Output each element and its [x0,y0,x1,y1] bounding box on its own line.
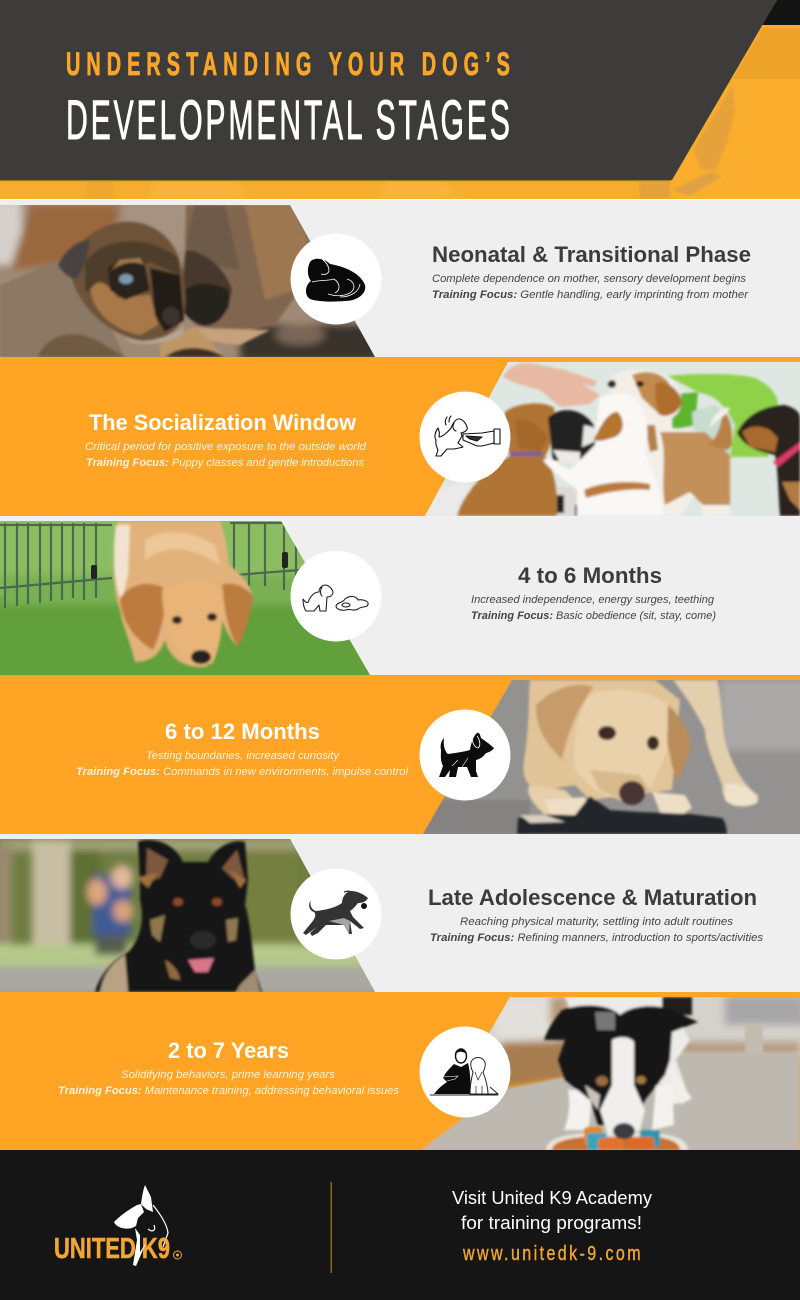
panel: late adolescence [0,834,800,996]
heading: The Socialization Window [89,410,357,435]
photo: puppy with mother [0,200,380,360]
divider [330,1182,332,1273]
body [523,680,680,800]
call to action text: Visit United K9 Academy [452,1188,652,1208]
photo: German shepherd [0,839,390,996]
description text: Increased independence, energy surges, teething [471,594,715,606]
mother snout [178,205,310,333]
icon: running dog with ball [290,868,382,960]
training focus text: Training Focus: Commands in new environments, impulse control [76,766,408,778]
title line 2: DEVELOPMENTAL STAGES [66,88,510,151]
training focus text: Training Focus: Basic obedience (sit, stay, come) [471,610,716,622]
header faded dog photo band [152,28,800,199]
dark puppy right [737,405,800,516]
header top-right black corner [762,0,800,25]
photo: labrador chewing shoe [420,680,800,834]
description text: Critical period for positive exposure to the outside world [85,441,367,453]
puppy body [0,262,125,357]
icon: sleeping dog and puppy [290,234,382,324]
photo: golden puppy sniffing grass [0,521,380,676]
training focus text: Training Focus: Gentle handling, early imprinting from mother [432,289,749,301]
shoe [517,796,727,834]
photo: puppies and hand [420,362,800,516]
green arch [667,374,778,457]
description text: Testing boundaries, increased curiosity [146,750,340,762]
panel: 4 to 6 months [0,516,800,676]
black puppy [548,410,595,463]
face [574,690,668,805]
description text: Complete dependence on mother, sensory development begins [432,273,746,285]
icon: puppy with hand [420,392,510,482]
heading: 6 to 12 Months [165,719,320,744]
icon: puppy and puddle [290,550,382,642]
heading: 4 to 6 Months [518,563,662,588]
head [544,1005,698,1125]
training focus text: Training Focus: Puppy classes and gentle introductions [86,457,364,469]
panel: 6 to 12 months [0,675,800,834]
tail [708,412,732,450]
far leg [673,680,758,806]
icon: black standing puppy [420,710,510,800]
footer panel [0,1150,800,1300]
bowl [546,1133,688,1150]
website url: www.unitedk-9.com [462,1242,641,1264]
puppy head [70,222,186,342]
header dark panel [0,0,777,180]
panel: socialization window [0,357,800,516]
training focus text: Training Focus: Maintenance training, addressing behavioral issues [58,1085,399,1097]
right ear [665,705,690,782]
training focus text: Training Focus: Refining manners, introduction to sports/activities [430,932,763,944]
icon: person sitting with dog [420,1026,510,1118]
description text: Solidifying behaviors, prime learning years [121,1069,335,1081]
back and rear legs [565,997,690,1105]
header panel [0,0,800,200]
heading: Neonatal & Transitional Phase [432,242,751,267]
logo wordmark: UNITED K9 [54,1233,170,1265]
heading: Late Adolescence & Maturation [428,885,757,910]
photo: border collie with puzzle feeder [420,995,800,1150]
hand [503,363,600,407]
logo: United K9 [54,1185,182,1266]
brown puppy [457,403,558,516]
heading: 2 to 7 Years [168,1038,289,1063]
panel: neonatal phase [0,200,800,360]
brown-white puppy back body [608,370,730,516]
left ear [536,685,593,760]
title line 1: UNDERSTANDING YOUR DOG’S [66,46,510,82]
description text: Reaching physical maturity, settling into adult routines [460,916,733,928]
panel: 2 to 7 years [0,992,800,1150]
call to action text line 2: for training programs! [461,1213,642,1233]
white puppy [543,394,663,516]
